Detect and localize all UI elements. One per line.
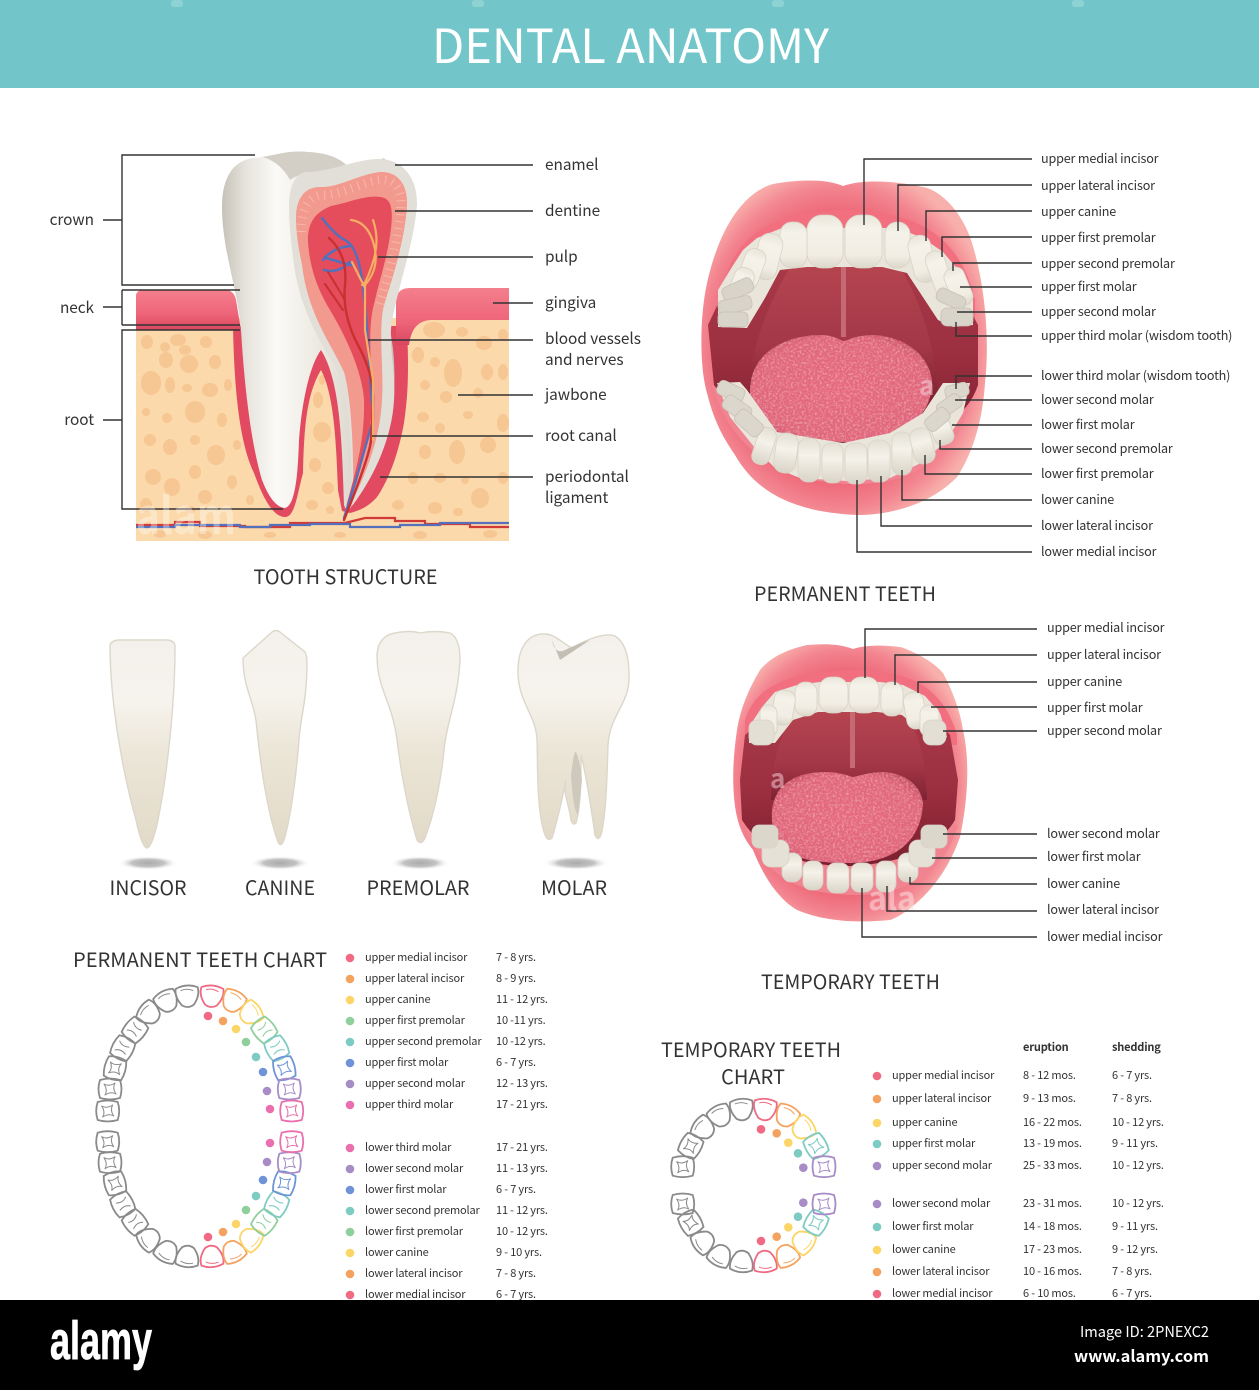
table: permanent eruption ages: 10 -12 yrs. — [496, 1033, 546, 1049]
table: temporary eruption and shedding: 16 - 22 mos. — [1023, 1114, 1082, 1130]
table: permanent eruption ages: 17 - 21 yrs. — [496, 1096, 548, 1112]
labels and leader lines: ligament — [545, 486, 608, 508]
table: temporary eruption and shedding: 9 - 11 yrs. — [1112, 1218, 1158, 1234]
table: temporary eruption and shedding: lower first molar — [892, 1218, 974, 1234]
table: temporary eruption and shedding: 7 - 8 yrs. — [1112, 1263, 1152, 1279]
tooth ring: coloured right half — [199, 985, 303, 1268]
watermark: a — [770, 759, 785, 796]
table: temporary eruption and shedding: 9 - 11 yrs. — [1112, 1135, 1158, 1151]
labels and leader lines: blood vessels — [545, 327, 641, 349]
table: permanent eruption ages: upper first premolar — [365, 1012, 466, 1028]
table: permanent eruption ages: 8 - 9 yrs. — [496, 970, 536, 986]
labels: upper second premolar — [1041, 253, 1175, 272]
labels: upper first molar — [1041, 276, 1137, 295]
premolar — [366, 632, 470, 901]
table: temporary eruption and shedding: lower lateral incisor — [892, 1263, 990, 1279]
image id: Image ID: 2PNEXC2 — [1080, 1321, 1209, 1342]
table: temporary eruption and shedding: 6 - 10 mos. — [1023, 1285, 1076, 1301]
table: temporary eruption and shedding: upper first molar — [892, 1135, 976, 1151]
table: permanent eruption ages: 6 - 7 yrs. — [496, 1181, 536, 1197]
table: temporary eruption and shedding: upper canine — [892, 1114, 957, 1130]
lower dental arch — [717, 382, 970, 481]
labels and leader lines: pulp — [545, 245, 578, 267]
tooth body — [222, 152, 417, 510]
labels: upper canine — [1041, 201, 1116, 220]
panel: temporary teeth chart — [661, 1034, 1164, 1301]
labels: lower second molar — [1047, 823, 1160, 842]
soft palate shading — [771, 712, 927, 800]
table: permanent eruption ages: 11 - 12 yrs. — [496, 991, 548, 1007]
table: permanent eruption ages: 12 - 13 yrs. — [496, 1075, 548, 1091]
labels: lower medial incisor — [1047, 926, 1163, 945]
table: temporary eruption and shedding: lower second molar — [892, 1195, 991, 1211]
tooth cross-section enamel — [289, 159, 417, 506]
nerves and vessels in the pulp — [322, 218, 376, 520]
table: permanent eruption ages: 11 - 12 yrs. — [496, 1202, 548, 1218]
canine: CANINE — [245, 872, 315, 901]
watermark: ala — [868, 874, 916, 920]
table: temporary eruption and shedding: 13 - 19 mos. — [1023, 1135, 1082, 1151]
labels: lower canine — [1047, 873, 1120, 892]
leader lines — [862, 629, 1037, 937]
upper dental arch — [749, 682, 947, 745]
tooth ring dots — [757, 1125, 808, 1245]
upper teeth — [725, 215, 976, 309]
labels and leader lines: neck — [60, 296, 95, 318]
table: permanent eruption ages: 6 - 7 yrs. — [496, 1054, 536, 1070]
panel: single tooth types — [110, 630, 629, 901]
tongue — [750, 335, 932, 442]
tooth ring dots — [204, 1012, 274, 1241]
tooth ring: coloured right half — [753, 1098, 836, 1273]
table: permanent eruption ages: upper medial incisor — [365, 949, 468, 965]
table: permanent eruption ages: 7 - 8 yrs. — [496, 1265, 536, 1281]
table: permanent eruption ages: lower lateral incisor — [365, 1265, 463, 1281]
heading: temporary chart: CHART — [721, 1061, 785, 1090]
upper gum — [710, 210, 975, 330]
labels: upper lateral incisor — [1047, 644, 1161, 663]
table: temporary eruption and shedding: lower medial incisor — [892, 1285, 993, 1301]
table: permanent eruption ages: lower medial incisor — [365, 1286, 466, 1302]
labels and leader lines: gingiva — [545, 291, 596, 313]
labels: lower lateral incisor — [1047, 899, 1159, 918]
table: permanent eruption ages: upper second premolar — [365, 1033, 482, 1049]
labels: lower first premolar — [1041, 463, 1154, 482]
tooth ring: grey left half — [96, 985, 200, 1268]
labels and leader lines: enamel — [545, 153, 598, 175]
upper dental arch — [718, 228, 973, 328]
labels and leader lines: periodontal — [545, 465, 629, 487]
table: permanent eruption ages: lower second molar — [365, 1160, 464, 1176]
title: DENTAL ANATOMY — [432, 8, 829, 77]
tooth ring: grey left half — [671, 1098, 754, 1273]
lower teeth — [752, 825, 947, 893]
labels and leader lines: root canal — [545, 424, 617, 446]
labels: lower first molar — [1041, 414, 1135, 433]
table: temporary eruption and shedding: 9 - 13 mos. — [1023, 1090, 1076, 1106]
heading: temporary chart: TEMPORARY TEETH — [661, 1034, 841, 1063]
labels: lower lateral incisor — [1041, 515, 1153, 534]
incisor — [110, 640, 187, 901]
labels and leader lines: dentine — [545, 199, 600, 221]
blood vessels in the bone — [136, 518, 509, 527]
molar: MOLAR — [541, 872, 607, 901]
table: temporary eruption and shedding: upper medial incisor — [892, 1067, 995, 1083]
table: temporary eruption and shedding: 7 - 8 yrs. — [1112, 1090, 1152, 1106]
table: permanent eruption ages: 9 - 10 yrs. — [496, 1244, 542, 1260]
table: permanent eruption ages: 10 - 12 yrs. — [496, 1223, 548, 1239]
footer url: www.alamy.com — [1074, 1343, 1209, 1367]
jawbone block — [136, 318, 509, 541]
mouth cavity — [740, 712, 958, 866]
footer logo: alamy — [50, 1311, 152, 1371]
molar — [518, 634, 629, 901]
panel: tooth structure — [50, 151, 641, 590]
incisor: INCISOR — [110, 872, 187, 901]
labels: lower canine — [1041, 489, 1114, 508]
labels — [1047, 617, 1165, 945]
watermark: alam — [136, 477, 236, 549]
tongue — [772, 772, 923, 863]
table: temporary eruption and shedding: 10 - 12 yrs. — [1112, 1195, 1164, 1211]
table: temporary eruption and shedding: 8 - 12 mos. — [1023, 1067, 1076, 1083]
lower gum — [712, 385, 975, 484]
table: temporary eruption and shedding: 23 - 31 mos. — [1023, 1195, 1082, 1211]
tooth cusp shading — [262, 151, 352, 180]
table: permanent eruption ages: 6 - 7 yrs. — [496, 1286, 536, 1302]
table: temporary eruption and shedding — [873, 1039, 1164, 1301]
labels: upper second molar — [1047, 720, 1162, 739]
heading: temporary chart — [661, 1034, 841, 1090]
table: temporary eruption and shedding: 14 - 18 mos. — [1023, 1218, 1082, 1234]
table: permanent eruption ages: lower first premolar — [365, 1223, 464, 1239]
table: temporary eruption and shedding: 9 - 12 yrs. — [1112, 1241, 1158, 1257]
lower gum — [742, 820, 958, 895]
table: permanent eruption ages: 10 -11 yrs. — [496, 1012, 546, 1028]
table: temporary eruption and shedding: 10 - 16 mos. — [1023, 1263, 1082, 1279]
labels: upper medial incisor — [1047, 617, 1165, 636]
table: temporary eruption and shedding: 10 - 12 yrs. — [1112, 1114, 1164, 1130]
premolar: PREMOLAR — [366, 872, 470, 901]
table: temporary eruption and shedding: upper second molar — [892, 1157, 993, 1173]
panel: permanent teeth mouth — [701, 148, 1232, 607]
labels and leader lines: and nerves — [545, 348, 624, 370]
labels and leader lines: crown — [50, 208, 94, 230]
labels: lower third molar (wisdom tooth) — [1041, 365, 1230, 384]
table: permanent eruption ages: 17 - 21 yrs. — [496, 1139, 548, 1155]
heading: temporary teeth: TEMPORARY TEETH — [761, 966, 940, 995]
labels: upper medial incisor — [1041, 148, 1159, 167]
palate seam — [850, 712, 855, 768]
heading: permanent chart: PERMANENT TEETH CHART — [73, 944, 327, 973]
lips — [701, 180, 987, 515]
table: temporary eruption and shedding: 6 - 7 yrs. — [1112, 1285, 1152, 1301]
table: permanent eruption ages: 7 - 8 yrs. — [496, 949, 536, 965]
labels: upper second molar — [1041, 301, 1156, 320]
table: permanent eruption ages: upper first molar — [365, 1054, 449, 1070]
table: temporary eruption and shedding: shedding — [1112, 1039, 1161, 1055]
labels and leader lines — [50, 153, 641, 509]
table: permanent eruption ages: upper second molar — [365, 1075, 466, 1091]
table: temporary eruption and shedding: 10 - 12 yrs. — [1112, 1157, 1164, 1173]
panel: permanent teeth chart — [73, 944, 548, 1302]
header banner — [0, 0, 1259, 88]
upper molars — [717, 276, 973, 327]
table: permanent eruption ages: upper canine — [365, 991, 430, 1007]
labels: lower second molar — [1041, 389, 1154, 408]
upper gum — [745, 670, 957, 745]
mouth cavity — [708, 262, 978, 445]
table: permanent eruption ages: 11 - 13 yrs. — [496, 1160, 548, 1176]
lips — [733, 644, 967, 921]
heading: permanent teeth: PERMANENT TEETH — [754, 578, 936, 607]
periodontal ligament — [233, 326, 408, 517]
table: permanent eruption ages — [346, 949, 548, 1302]
labels: upper canine — [1047, 671, 1122, 690]
table: permanent eruption ages: upper third molar — [365, 1096, 454, 1112]
lower molars — [715, 379, 970, 439]
pulp — [308, 197, 392, 507]
soft palate shading — [748, 267, 938, 400]
labels: lower first molar — [1047, 846, 1141, 865]
upper teeth — [749, 677, 946, 745]
labels: lower medial incisor — [1041, 541, 1157, 560]
table: temporary eruption and shedding: lower canine — [892, 1241, 956, 1257]
table: temporary eruption and shedding: eruption — [1023, 1039, 1069, 1055]
footer bar — [0, 1300, 1259, 1390]
labels and leader lines: root — [64, 408, 94, 430]
table: temporary eruption and shedding: upper lateral incisor — [892, 1090, 992, 1106]
table: temporary eruption and shedding: 17 - 23 mos. — [1023, 1241, 1082, 1257]
labels: upper first premolar — [1041, 227, 1156, 246]
labels: upper lateral incisor — [1041, 175, 1155, 194]
canine — [243, 630, 315, 901]
table: permanent eruption ages: lower second premolar — [365, 1202, 481, 1218]
leader lines — [857, 159, 1032, 552]
gingiva right — [396, 288, 509, 345]
dentine — [296, 172, 407, 500]
palate seam — [841, 267, 846, 337]
heading: tooth structure: TOOTH STRUCTURE — [254, 561, 438, 590]
table: temporary eruption and shedding: 6 - 7 yrs. — [1112, 1067, 1152, 1083]
watermark: a — [919, 366, 934, 403]
labels: upper third molar (wisdom tooth) — [1041, 325, 1232, 344]
labels: lower second premolar — [1041, 438, 1173, 457]
table: permanent eruption ages: lower third molar — [365, 1139, 452, 1155]
labels — [1041, 148, 1232, 560]
labels and leader lines: jawbone — [544, 383, 607, 405]
table: permanent eruption ages: upper lateral incisor — [365, 970, 465, 986]
dentine tubules — [301, 180, 401, 305]
table: permanent eruption ages: lower canine — [365, 1244, 429, 1260]
labels: upper first molar — [1047, 697, 1143, 716]
table: permanent eruption ages: lower first molar — [365, 1181, 447, 1197]
panel: temporary teeth mouth — [733, 617, 1165, 995]
gingiva left — [136, 290, 241, 330]
lower teeth — [750, 414, 956, 484]
table: temporary eruption and shedding: 25 - 33 mos. — [1023, 1157, 1082, 1173]
